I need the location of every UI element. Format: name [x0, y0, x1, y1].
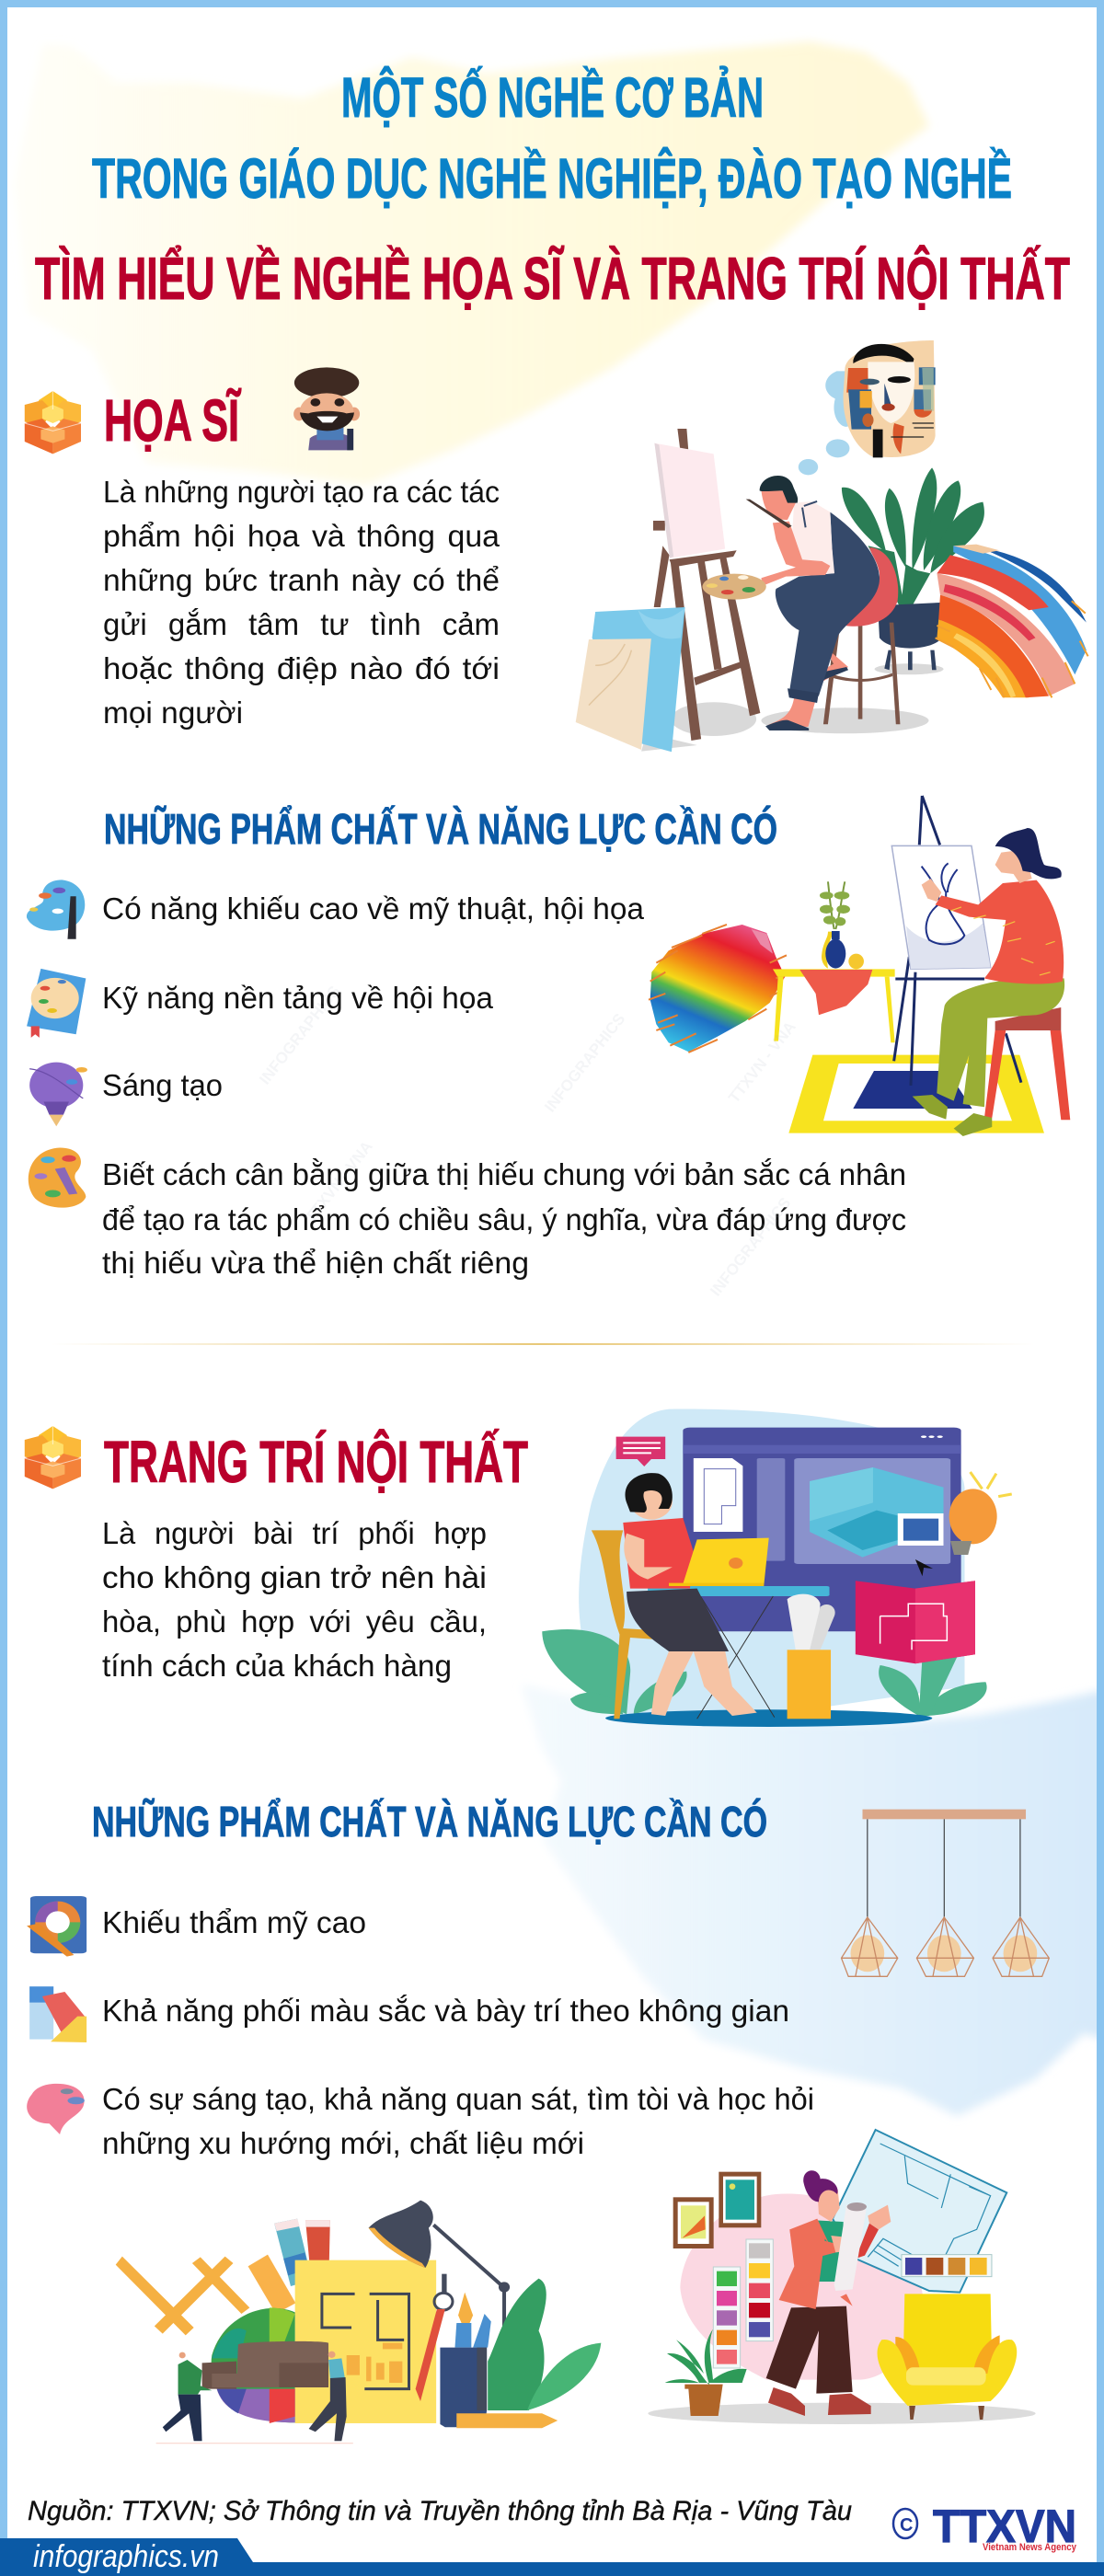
faint watermarks: TTXVN - VNA	[725, 1018, 799, 1106]
item text: Kỹ năng nền tảng về hội họa	[102, 981, 494, 1015]
faint watermarks: INFOGRAPHICS	[707, 1194, 794, 1299]
background: yellow watercolor wash	[14, 41, 929, 485]
pot	[878, 603, 942, 649]
illustration: woman painting at easel	[649, 796, 1070, 1136]
item text: Sáng tạo	[102, 1068, 223, 1102]
icon: brain with gears	[27, 2084, 85, 2134]
text block: painter description: gửi gắm tâm tư tình cảm	[103, 607, 500, 641]
stacked canvases	[592, 607, 685, 752]
copyright mark: C	[900, 2515, 913, 2536]
item text: những xu hướng mới, chất liệu mới	[102, 2126, 584, 2160]
plant leaves	[488, 2279, 601, 2410]
list: painter qualities	[27, 880, 906, 1280]
icon: orange cube, interior section	[25, 1426, 81, 1489]
item 2	[27, 969, 494, 1038]
rainbow paint stroke	[649, 925, 787, 1052]
floor shadows	[641, 663, 944, 752]
swatch fans	[248, 2219, 330, 2314]
list: interior decoration qualities	[27, 1896, 814, 2160]
pink backdrop	[680, 2193, 924, 2380]
abstract face artwork	[825, 340, 936, 457]
picture frames	[673, 2172, 761, 2248]
text block: interior decoration description: Là người bài trí phối hợp	[102, 1516, 487, 1550]
easel	[653, 429, 760, 741]
faint watermarks	[256, 983, 799, 1299]
big pencil	[456, 2413, 558, 2428]
plants	[542, 1629, 987, 1716]
lamp bulbs	[850, 1935, 1037, 1972]
illustration: interior designer with blueprint	[648, 2130, 1036, 2424]
text block: painter description	[103, 475, 500, 730]
heading: interior decoration: TRANG TRÍ NỘI THẤT	[104, 1428, 528, 1495]
logo: TTXVN	[893, 2501, 1077, 2553]
title line 1: MỘT SỐ NGHỀ CƠ BẢN	[341, 66, 764, 129]
icon: art book	[27, 969, 86, 1038]
item 1	[27, 880, 645, 939]
item text: Có năng khiếu cao về mỹ thuật, hội họa	[102, 891, 645, 926]
floor line	[156, 2443, 353, 2444]
item 4	[29, 1147, 906, 1280]
stool	[984, 1007, 1070, 1120]
heading: qualities of an interior decorator: NHỮNG PHẨM CHẤT VÀ NĂNG LỰC CẦN CÓ	[92, 1798, 767, 1846]
blueprint	[833, 2130, 1006, 2293]
folding ruler	[116, 2257, 249, 2335]
yellow floor plan	[295, 2260, 436, 2423]
blank canvas	[654, 443, 725, 558]
desk lamp	[369, 2201, 510, 2410]
vase with plant	[820, 881, 864, 969]
floor ellipse	[605, 1709, 932, 1727]
item text: thị hiếu vừa thể hiện chất riêng	[102, 1246, 529, 1280]
designer figure	[766, 2170, 891, 2416]
yellow armchair	[878, 2294, 1017, 2420]
plant	[842, 467, 984, 605]
woman figure	[913, 828, 1064, 1136]
colour strip left	[713, 2267, 741, 2368]
heading: painter: HỌA SĨ	[104, 387, 242, 454]
text block: painter description: mọi người	[103, 696, 243, 730]
item text: Khiếu thẩm mỹ cao	[102, 1905, 366, 1939]
background: blue watercolor wash	[521, 1684, 1104, 2116]
thought clouds	[799, 439, 849, 475]
item 2	[29, 1986, 789, 2042]
colour strip right	[746, 2239, 773, 2341]
paint stroke	[936, 545, 1088, 697]
lamp bar	[862, 1810, 1026, 1819]
sofa	[202, 2341, 328, 2389]
blue backdrop blob	[579, 1409, 964, 1714]
text block: interior decoration description: cho không gian trở nên hài	[102, 1560, 487, 1594]
palette	[703, 574, 766, 600]
light bulb	[949, 1472, 1012, 1555]
pen holder	[440, 2348, 487, 2427]
heading: qualities of a painter: NHỮNG PHẨM CHẤT VÀ NĂNG LỰC CẦN CÓ	[104, 805, 777, 853]
item text: Có sự sáng tạo, khả năng quan sát, tìm tòi và học hỏi	[102, 2082, 814, 2116]
rug	[788, 1055, 1044, 1133]
icon: color wheel app	[27, 1896, 86, 1957]
item text	[102, 1157, 906, 1280]
pencil holder with rolls	[788, 1594, 835, 1719]
copyright mark	[893, 2509, 917, 2538]
illustration: interior tools and furniture movers	[116, 2201, 601, 2444]
lamp cages	[842, 1917, 1049, 1976]
floor shadow	[648, 2403, 1036, 2424]
text block: interior decoration description	[102, 1516, 487, 1683]
illustration: interior designer at desk	[542, 1409, 1012, 1727]
item 3	[29, 1063, 223, 1126]
icon: artist avatar	[293, 367, 360, 450]
color wheel	[212, 2307, 295, 2423]
faint watermarks: TTXVN - VNA	[302, 1138, 376, 1225]
item 3	[27, 2082, 814, 2160]
easel	[894, 796, 1021, 1086]
screen	[683, 1428, 961, 1631]
text block: interior decoration description: hòa, phù hợp với yêu cầu,	[102, 1604, 487, 1639]
footer bar	[0, 2538, 1104, 2576]
text block: painter description: hoặc thông điệp nào đó tới	[103, 651, 500, 685]
woman at laptop	[623, 1473, 757, 1716]
item text: Khả năng phối màu sắc và bày trí theo không gian	[102, 1994, 789, 2028]
stool	[823, 623, 900, 724]
stool seat	[845, 547, 898, 627]
speech bubble	[616, 1437, 665, 1466]
title	[35, 66, 1070, 312]
faint watermarks: INFOGRAPHICS	[256, 983, 343, 1087]
icon: orange cube, painter section	[25, 391, 81, 454]
table	[773, 969, 895, 1042]
illustration: pendant lamps	[842, 1810, 1049, 1976]
item text: Biết cách cân bằng giữa thị hiếu chung với bản sắc cá nhân	[102, 1157, 906, 1191]
divider	[51, 1343, 1035, 1345]
material swatches	[902, 2255, 992, 2277]
table	[648, 1586, 830, 1719]
text block: painter description: Là những người tạo ra các tác	[103, 475, 500, 509]
chair	[592, 1530, 673, 1719]
source line: Nguồn: TTXVN; Sở Thông tin và Truyền thông tỉnh Bà Rịa - Vũng Tàu	[28, 2496, 852, 2526]
potted plant	[665, 2329, 747, 2416]
text block: painter description: phẩm hội họa và thông qua	[103, 519, 500, 553]
item 1	[27, 1896, 366, 1957]
illustration: painter at easel	[576, 340, 1088, 752]
footer url: infographics.vn	[33, 2539, 219, 2574]
compass and pens	[416, 2274, 491, 2401]
icon: blue palette	[27, 880, 85, 939]
lamp cords	[868, 1819, 1020, 1917]
text block: painter description: những bức tranh này có thể	[103, 563, 500, 597]
person in blue	[309, 2352, 347, 2441]
laptop	[669, 1538, 769, 1586]
canvas	[891, 845, 991, 969]
text block: interior decoration description: tính cách của khách hàng	[102, 1649, 452, 1683]
person in green	[163, 2352, 212, 2441]
icon: creative bulb	[29, 1063, 87, 1126]
faint watermarks: INFOGRAPHICS	[541, 1010, 628, 1115]
item text	[102, 2082, 814, 2160]
painter figure	[746, 476, 880, 730]
item text: để tạo ra tác phẩm có chiều sâu, ý nghĩa, vừa đáp ứng được	[102, 1202, 906, 1236]
logo tagline: Vietnam News Agency	[983, 2542, 1077, 2553]
logo wordmark: TTXVN	[933, 2501, 1076, 2552]
floor plan map	[856, 1581, 975, 1663]
icon: colour swatches	[29, 1986, 86, 2042]
icon: orange palette	[29, 1147, 86, 1208]
